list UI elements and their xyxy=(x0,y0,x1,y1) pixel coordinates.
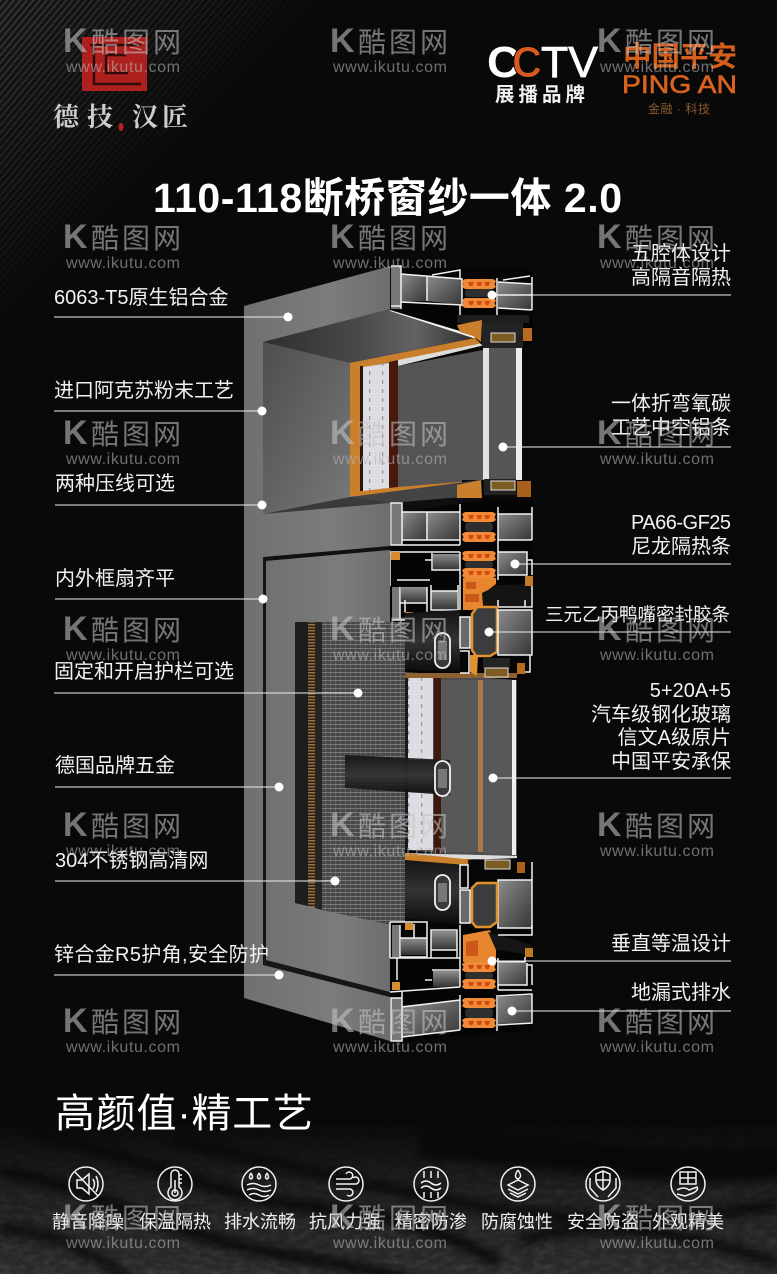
callout: mesh: 304不锈钢高清网 xyxy=(55,849,208,872)
lower frame profile xyxy=(390,858,533,1041)
watermark grid: 酷图网 xyxy=(91,419,184,450)
watermark grid: 酷图网 xyxy=(358,223,451,254)
outer aluminium frame face xyxy=(244,266,390,1041)
watermark grid: www.ikutu.com xyxy=(65,451,180,468)
watermark grid: www.ikutu.com xyxy=(332,255,447,272)
feature icon row xyxy=(69,1167,705,1201)
watermark grid: 酷图网 xyxy=(91,27,184,58)
watermark grid: www.ikutu.com xyxy=(599,59,714,76)
watermark grid: K xyxy=(597,610,625,648)
callout: five chambers: 五腔体设计 xyxy=(631,242,731,265)
callout: glass xyxy=(488,680,731,782)
logo: CCTV 展播品牌 xyxy=(487,38,599,106)
section heading: 高颜值·精工艺 xyxy=(55,1092,313,1136)
watermark grid: 酷图网 xyxy=(625,1203,718,1234)
logo: 匠 red seal and calligraphy xyxy=(53,37,188,134)
watermark grid: 酷图网 xyxy=(358,419,451,450)
watermark grid: www.ikutu.com xyxy=(599,843,714,860)
icon: drainage water xyxy=(242,1167,276,1201)
feature labels: 抗风力强 xyxy=(309,1212,381,1232)
callout: hardware xyxy=(55,754,284,792)
callout: spacer: 工艺中空铝条 xyxy=(611,416,731,439)
logo: 中国平安 PING AN xyxy=(622,41,737,116)
middle sash bar with oval xyxy=(345,755,450,796)
watermark grid: 酷图网 xyxy=(91,811,184,842)
lower casement sash and glass xyxy=(405,672,517,860)
stainless steel screen xyxy=(295,622,405,928)
bottom sash section xyxy=(405,853,478,925)
watermark grid: K xyxy=(63,1198,91,1236)
callout: drainage: 地漏式排水 xyxy=(631,981,731,1004)
watermark grid: 酷图网 xyxy=(625,615,718,646)
watermark grid: www.ikutu.com xyxy=(65,843,180,860)
callout: spacer: 一体折弯氧碳 xyxy=(611,392,731,415)
callout: flush frame: 内外框扇齐平 xyxy=(55,567,175,590)
callout: thermal strip xyxy=(510,512,731,568)
logo: CCTV 展播品牌: C xyxy=(487,38,520,87)
feature labels xyxy=(52,1212,724,1232)
callout: isotherm: 垂直等温设计 xyxy=(611,932,731,955)
watermark grid: K xyxy=(597,806,625,844)
watermark grid: 酷图网 xyxy=(625,223,718,254)
watermark grid: www.ikutu.com xyxy=(65,255,180,272)
icon: corrosion layers xyxy=(501,1167,535,1201)
logo: 匠 red seal and calligraphy: 匠 xyxy=(162,97,188,134)
watermark grid: 酷图网 xyxy=(91,615,184,646)
feature labels: 防腐蚀性 xyxy=(481,1212,553,1232)
logo: 中国平安 PING AN: PING AN xyxy=(622,71,737,99)
icon: mute xyxy=(69,1167,103,1201)
lower opening frame xyxy=(263,546,390,997)
callout: EPDM gasket: 三元乙丙鸭嘴密封胶条 xyxy=(545,604,730,625)
watermark grid: K xyxy=(597,1198,625,1236)
watermark grid: K xyxy=(330,218,358,256)
callout: thermal strip: PA66-GF25 xyxy=(631,512,731,534)
callout: guardrail: 固定和开启护栏可选 xyxy=(54,660,234,683)
watermark grid: K xyxy=(63,22,91,60)
callout: glass: 汽车级钢化玻璃 xyxy=(591,703,731,726)
logo: 匠 red seal and calligraphy: 技 xyxy=(87,97,113,134)
watermark grid: K xyxy=(63,414,91,452)
logo: 匠 red seal and calligraphy: 汉 xyxy=(132,97,158,134)
watermark grid: www.ikutu.com xyxy=(599,1235,714,1252)
watermark grid: www.ikutu.com xyxy=(599,451,714,468)
watermark grid: K xyxy=(330,1002,358,1040)
callout: bead options: 两种压线可选 xyxy=(55,472,175,495)
watermark grid: K xyxy=(330,806,358,844)
logo: 中国平安 PING AN: 中国平安 xyxy=(623,41,737,72)
feature labels: 排水流畅 xyxy=(224,1212,296,1232)
watermark grid: www.ikutu.com xyxy=(65,59,180,76)
watermark grid: www.ikutu.com xyxy=(599,255,714,272)
callout: powder coating: 进口阿克苏粉末工艺 xyxy=(54,379,234,402)
callout: corner protector: 锌合金R5护角,安全防护 xyxy=(54,943,269,966)
watermark grid: K xyxy=(63,1002,91,1040)
callout: thermal strip: 尼龙隔热条 xyxy=(631,535,731,558)
callout: bead options xyxy=(55,472,266,510)
watermark grid: 酷图网 xyxy=(625,419,718,450)
icon: waterproof seal xyxy=(414,1167,448,1201)
watermark grid: 酷图网 xyxy=(625,27,718,58)
watermark grid: K xyxy=(597,1002,625,1040)
logo: 匠 red seal and calligraphy: 德 xyxy=(53,97,81,134)
feature labels: 安全防盗 xyxy=(567,1212,639,1232)
callout: glass: 中国平安承保 xyxy=(611,750,731,773)
watermark grid: K xyxy=(330,22,358,60)
callout: mesh xyxy=(55,849,340,886)
callout: five chambers: 高隔音隔热 xyxy=(631,266,731,289)
callout: powder coating xyxy=(54,379,266,416)
watermark grid: www.ikutu.com xyxy=(332,1235,447,1252)
upper fixed window opening xyxy=(263,309,522,514)
watermark grid: 酷图网 xyxy=(91,223,184,254)
feature labels: 静音降噪 xyxy=(52,1212,124,1232)
watermark grid: www.ikutu.com xyxy=(332,59,447,76)
callout: glass: 5+20A+5 xyxy=(650,680,731,702)
watermark grid: www.ikutu.com xyxy=(332,843,447,860)
right callouts xyxy=(484,242,731,1016)
feature labels: 外观精美 xyxy=(652,1212,724,1232)
logo: 中国平安 PING AN: 金融 · 科技 xyxy=(648,101,710,116)
middle frame profile xyxy=(350,479,533,680)
icon: thermometer xyxy=(158,1167,192,1201)
callout: drainage xyxy=(508,981,731,1016)
product: window cross-section xyxy=(244,266,533,1041)
callout: flush frame xyxy=(55,567,268,604)
callout: isotherm xyxy=(488,932,731,966)
watermark grid: www.ikutu.com xyxy=(65,1039,180,1056)
callout: EPDM gasket xyxy=(484,604,731,636)
callout: glass: 信文A级原片 xyxy=(618,726,731,749)
watermark grid: www.ikutu.com xyxy=(65,1235,180,1252)
watermark grid: www.ikutu.com xyxy=(332,451,447,468)
watermark grid: www.ikutu.com xyxy=(599,647,714,664)
watermark grid: K xyxy=(330,1198,358,1236)
logo: CCTV 展播品牌: 展播品牌 xyxy=(495,84,589,106)
watermark grid: 酷图网 xyxy=(358,811,451,842)
top frame profile xyxy=(390,266,533,348)
watermark grid: 酷图网 xyxy=(91,1007,184,1038)
feature labels: 精密防渗 xyxy=(395,1212,467,1232)
logo: CCTV 展播品牌: C xyxy=(512,38,542,87)
watermark grid: 酷图网 xyxy=(625,811,718,842)
watermark grid: 酷图网 xyxy=(358,615,451,646)
watermark grid: 酷图网 xyxy=(625,1007,718,1038)
feature labels: 保温隔热 xyxy=(139,1212,211,1232)
watermark grid: www.ikutu.com xyxy=(332,1039,447,1056)
watermark grid: 酷图网 xyxy=(91,1203,184,1234)
watermark grid: www.ikutu.com xyxy=(599,1039,714,1056)
icon: window on hand xyxy=(671,1167,705,1201)
callout: hardware: 德国品牌五金 xyxy=(55,754,175,777)
watermark grid: K xyxy=(330,414,358,452)
callout: five chambers xyxy=(488,242,731,300)
watermark grid: K xyxy=(597,414,625,452)
upper sash section xyxy=(405,607,532,677)
icon: shield hands xyxy=(586,1167,620,1201)
callout: spacer xyxy=(498,392,731,452)
watermark grid: K xyxy=(597,218,625,256)
watermark grid: www.ikutu.com xyxy=(332,647,447,664)
watermark grid: K xyxy=(63,218,91,256)
callout: 6063-T5: 6063-T5原生铝合金 xyxy=(54,286,228,309)
watermark grid: 酷图网 xyxy=(358,1203,451,1234)
watermark grid: 酷图网 xyxy=(358,27,451,58)
watermark grid: K xyxy=(330,610,358,648)
left callouts xyxy=(54,286,362,980)
callout: corner protector xyxy=(54,943,284,980)
title: 110-118断桥窗纱一体 2.0 xyxy=(153,175,622,221)
icon: wind xyxy=(329,1167,363,1201)
callout: 6063-T5 xyxy=(54,286,292,322)
logo: CCTV 展播品牌: TV xyxy=(541,38,599,87)
watermark grid: 酷图网 xyxy=(358,1007,451,1038)
callout: guardrail xyxy=(54,660,362,698)
watermark grid: www.ikutu.com xyxy=(65,647,180,664)
watermark grid: K xyxy=(63,610,91,648)
watermark grid: K xyxy=(597,22,625,60)
watermark grid: K xyxy=(63,806,91,844)
